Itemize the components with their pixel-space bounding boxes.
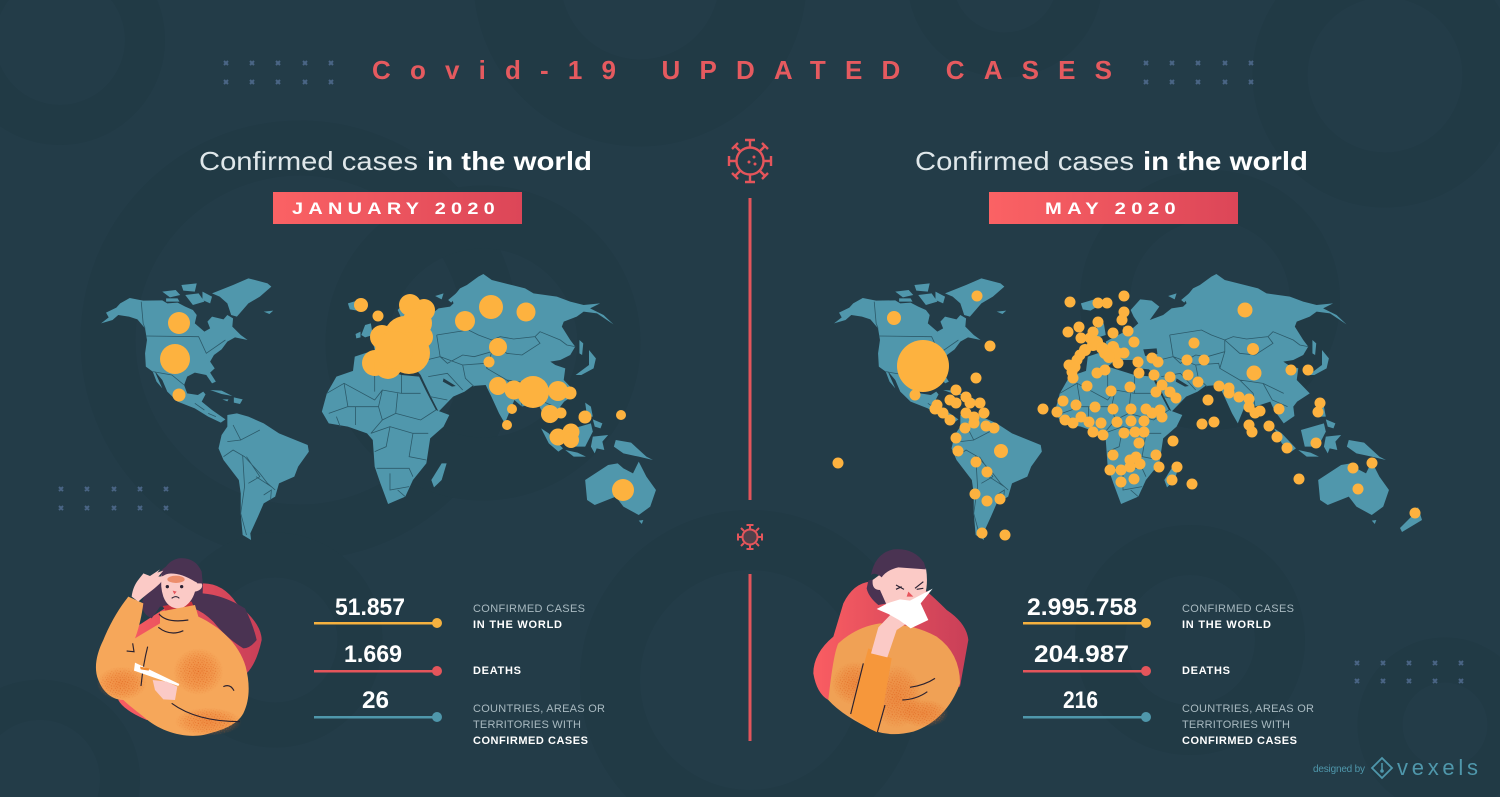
world map: january 2020 [101,274,656,540]
face [161,573,202,609]
stat: deaths [1023,641,1230,677]
tissue [877,589,933,628]
watermark: vexels [1313,755,1478,780]
stat: countries: COUNTRIES, AREAS OR [1182,703,1314,715]
stat: countries: TERRITORIES WITH [1182,719,1290,731]
red blob [813,582,968,700]
stat: deaths [314,641,521,677]
sweater lines [127,614,240,722]
sleeve [850,648,892,732]
stats: may [1023,594,1314,747]
heading: may: Confirmed cases [915,146,1134,176]
stat: deaths: 1.669 [344,641,402,668]
world map: may 2020 [832,274,1422,540]
icon: virus top [729,140,771,182]
stat: deaths: 204.987 [1034,641,1129,668]
date label: may 2020 [989,192,1238,224]
arm [871,608,912,657]
case bubbles: january [160,294,634,501]
stat: countries: TERRITORIES WITH [473,719,581,731]
stat: confirmed cases: 2.995.758 [1027,594,1137,621]
icon: virus small [738,525,762,549]
stat: countries: CONFIRMED CASES [473,735,588,747]
sweater grain [97,648,242,736]
body grain [832,662,948,728]
face [873,567,927,610]
watermark: vexels: vexels [1397,755,1478,780]
stat: confirmed cases [314,594,585,631]
raised hand [132,569,166,602]
decorative x marks [59,61,1463,683]
stat: deaths: DEATHS [473,665,521,677]
stats: january [314,594,605,747]
date label: may 2020: MAY 2020 [1045,199,1181,218]
stat: confirmed cases [1023,594,1294,631]
stat: countries: CONFIRMED CASES [1182,735,1297,747]
stat: confirmed cases: IN THE WORLD [1182,619,1271,631]
divider line bottom [748,574,752,741]
stat: countries [1023,687,1314,747]
date label: january 2020 [273,192,522,224]
date label: january 2020: JANUARY 2020 [292,199,500,218]
stat: confirmed cases: CONFIRMED CASES [1182,603,1294,615]
stat: deaths: DEATHS [1182,665,1230,677]
divider line top [748,198,752,500]
body lines [851,663,935,732]
lower hand [153,680,177,700]
heading: january: in the world [427,146,592,176]
stat: countries: COUNTRIES, AREAS OR [473,703,605,715]
watermark: vexels: designed by [1313,764,1365,775]
red blob [118,583,262,720]
heading: may [915,146,1308,176]
stat: confirmed cases: IN THE WORLD [473,619,562,631]
hair [142,561,257,648]
heading: january [199,146,592,176]
thermometer [134,663,179,686]
sweater [96,597,249,736]
fringe [162,558,203,583]
case bubbles: may [832,290,1420,540]
stat: confirmed cases: CONFIRMED CASES [473,603,585,615]
illustration: woman with fever [96,558,262,736]
stat: confirmed cases: 51.857 [335,594,405,621]
body [828,623,960,734]
hair [871,549,926,577]
neck [163,602,195,614]
stat: countries: 216 [1063,687,1098,714]
stat: countries: 26 [362,687,389,714]
hair back [867,577,887,605]
closed eyes [896,582,923,589]
stat: countries [314,687,605,747]
illustration: man sneezing [813,549,968,734]
heading: january: Confirmed cases [199,146,418,176]
title: Covid-19 UPDATED CASES [372,55,1112,85]
heading: may: in the world [1143,146,1308,176]
